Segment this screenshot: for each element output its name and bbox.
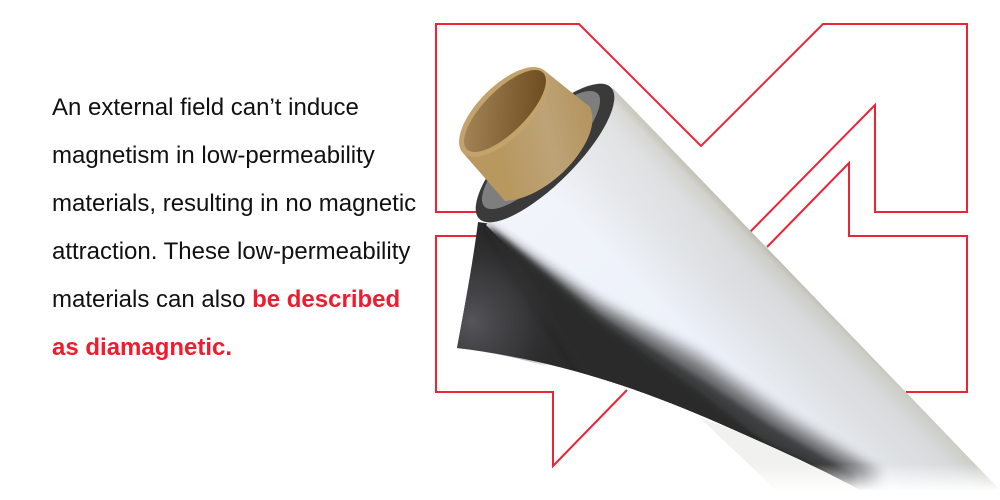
text block: explanation of low-permeability materials: [52, 94, 416, 361]
magnetic roll: [445, 53, 1000, 500]
bottom fade: [690, 464, 1000, 491]
black sheet: [457, 222, 880, 490]
text block: explanation of low-permeability materials: materials, resulting in no magnetic: [52, 190, 416, 217]
cardboard tube interior: [452, 58, 558, 164]
sheet highlight: [457, 222, 600, 385]
text block: explanation of low-permeability materials: magnetism in low-permeability: [52, 142, 375, 169]
illustration: M logo outline with magnetic sheet roll: [435, 23, 996, 490]
cardboard tube outer wall: [463, 71, 592, 201]
text block: explanation of low-permeability materials: attraction. These low-permeability: [52, 238, 410, 265]
bottom clear: [690, 490, 1000, 500]
cardboard tube rim: [445, 53, 563, 171]
text block: explanation of low-permeability materials: as diamagnetic.: [52, 334, 232, 361]
text block: explanation of low-permeability materials: An external field can’t induce: [52, 94, 359, 121]
red M outline: [436, 24, 967, 466]
white roll body with shaded fold: [486, 88, 1000, 500]
roll end: [457, 65, 633, 241]
roll end highlight: [467, 76, 615, 224]
text block: explanation of low-permeability materials: materials can also be described: [52, 286, 400, 313]
pale underside of sheet: [700, 418, 860, 492]
